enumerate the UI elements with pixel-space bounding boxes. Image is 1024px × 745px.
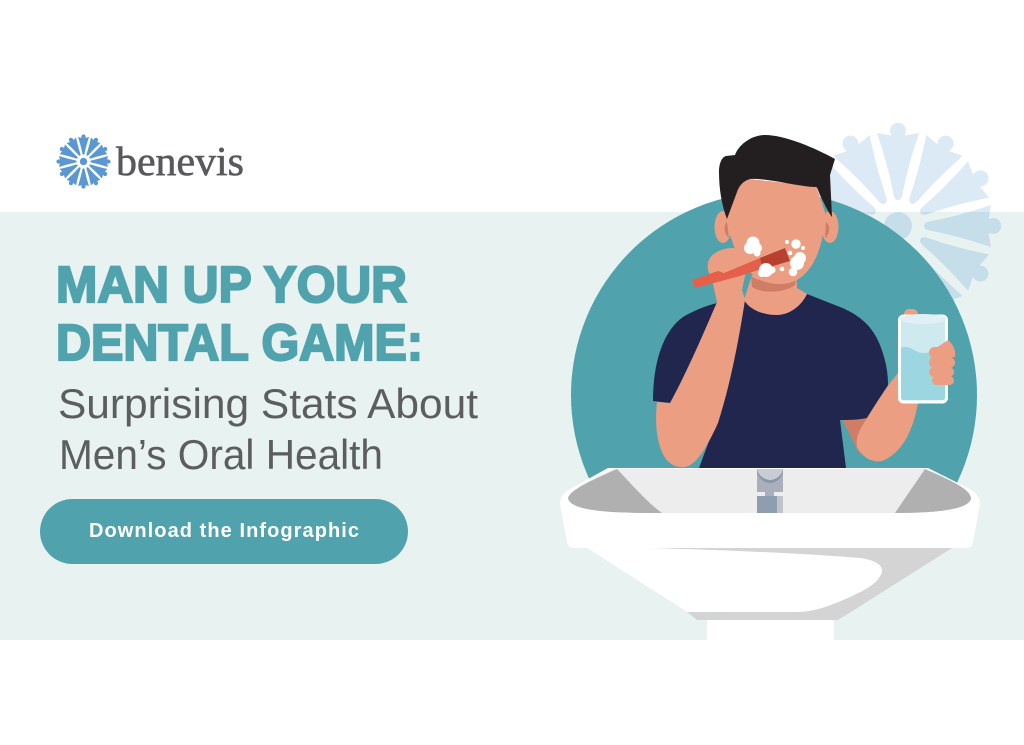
teal circle	[571, 192, 977, 598]
right arm	[857, 373, 918, 461]
fingers	[929, 340, 955, 385]
background band	[0, 212, 1024, 640]
left ear	[714, 211, 732, 243]
faucet	[757, 469, 783, 513]
title: DENTAL GAME:	[56, 314, 423, 371]
title	[56, 256, 423, 371]
subtitle: Surprising Stats About	[58, 380, 478, 427]
sink	[560, 468, 980, 640]
face	[727, 178, 825, 284]
subtitle: Men’s Oral Health	[59, 431, 383, 478]
right ear	[822, 211, 838, 243]
sink underside highlight	[587, 548, 882, 612]
button	[40, 499, 408, 564]
right forearm shadow	[842, 415, 869, 455]
man brushing teeth	[653, 135, 955, 468]
sink pedestal	[707, 620, 834, 640]
toothbrush handle	[692, 258, 764, 288]
inner ears	[725, 222, 829, 238]
hair	[719, 135, 835, 219]
subtitle	[58, 380, 478, 478]
button: Download the Infographic	[89, 520, 359, 542]
decorative flower behind figure	[816, 123, 1002, 300]
sink rim	[560, 468, 980, 548]
logo	[56, 134, 244, 189]
sink basin	[568, 469, 971, 513]
hand behind glass	[918, 404, 919, 405]
glass	[900, 314, 946, 402]
toothbrush head	[760, 248, 790, 266]
left arm	[656, 262, 748, 467]
foam	[744, 236, 806, 277]
basin right shade	[895, 469, 971, 513]
sink underside	[587, 548, 952, 620]
thumb behind glass	[904, 309, 918, 314]
logo wordmark: benevis	[116, 138, 244, 184]
neck shadow	[751, 275, 796, 292]
shirt	[653, 294, 888, 468]
infographic canvas	[0, 123, 1024, 640]
title: MAN UP YOUR	[56, 256, 407, 313]
hand on brush	[708, 248, 742, 274]
logo icon: flower	[56, 134, 111, 189]
neck	[744, 274, 807, 315]
basin left shade	[568, 469, 662, 513]
